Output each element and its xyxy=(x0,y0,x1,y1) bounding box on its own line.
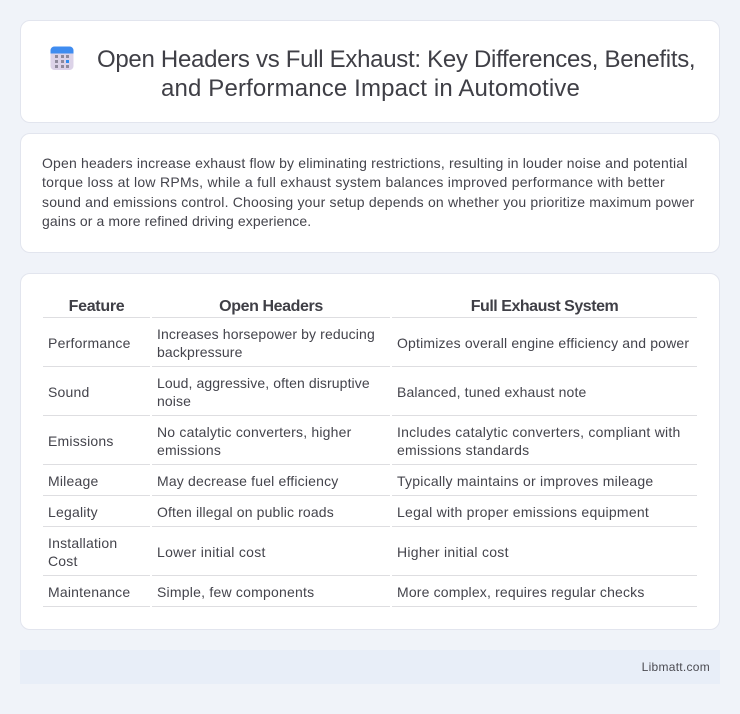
title xyxy=(97,46,695,102)
intro text: Open headers increase exhaust flow by eliminating restrictions, resulting in louder noise and potential xyxy=(42,155,688,171)
row: emissions xyxy=(48,424,681,458)
intro card xyxy=(20,133,720,253)
row: installation cost: Cost xyxy=(48,553,78,569)
row: maintenance: More complex, requires regular checks xyxy=(397,584,644,600)
row: performance: backpressure xyxy=(157,344,242,360)
intro text xyxy=(42,155,694,229)
intro text: torque loss at low RPMs, while a full exhaust system balances improved performance with better xyxy=(42,174,665,190)
table header: Full Exhaust System xyxy=(471,298,618,315)
row: sound: Sound xyxy=(48,384,89,400)
row: performance: Increases horsepower by reducing xyxy=(157,326,375,342)
row: installation cost: Lower initial cost xyxy=(157,544,266,560)
row: installation cost: Installation xyxy=(48,535,117,551)
row: maintenance xyxy=(48,584,644,600)
row: installation cost xyxy=(48,535,509,569)
title: Open Headers vs Full Exhaust: Key Differences, Benefits, xyxy=(97,46,695,73)
table header: Open Headers xyxy=(219,298,323,315)
row: performance: Optimizes overall engine efficiency and power xyxy=(397,335,689,351)
row: performance xyxy=(48,326,689,360)
row: legality: Legality xyxy=(48,504,98,520)
row: sound xyxy=(48,375,586,409)
row: sound: noise xyxy=(157,393,191,409)
footer credit: Libmatt.com xyxy=(642,660,710,674)
icon: calendar xyxy=(50,46,74,70)
row: mileage: Mileage xyxy=(48,473,98,489)
table header: Feature xyxy=(69,298,124,315)
row: maintenance: Simple, few components xyxy=(157,584,314,600)
table header xyxy=(69,298,618,315)
row: emissions: No catalytic converters, higher xyxy=(157,424,352,440)
row: performance: Performance xyxy=(48,335,131,351)
title: and Performance Impact in Automotive xyxy=(161,75,580,102)
row: sound: Loud, aggressive, often disruptive xyxy=(157,375,370,391)
row: emissions: Includes catalytic converters, compliant with xyxy=(397,424,681,440)
row: emissions: Emissions xyxy=(48,433,114,449)
comparison table card xyxy=(20,273,720,630)
row: emissions: emissions standards xyxy=(397,442,529,458)
row: sound: Balanced, tuned exhaust note xyxy=(397,384,586,400)
row: legality: Legal with proper emissions equipment xyxy=(397,504,649,520)
row: emissions: emissions xyxy=(157,442,221,458)
footer bar xyxy=(20,650,720,684)
row: maintenance: Maintenance xyxy=(48,584,130,600)
title card xyxy=(20,20,720,123)
row: mileage: May decrease fuel efficiency xyxy=(157,473,338,489)
intro text: gains or a more refined driving experience. xyxy=(42,213,311,229)
intro text: sound and emissions control. Choosing your setup depends on whether you prioritize maximum power xyxy=(42,194,694,210)
row: mileage: Typically maintains or improves mileage xyxy=(397,473,653,489)
row: legality: Often illegal on public roads xyxy=(157,504,334,520)
row: legality xyxy=(48,504,649,520)
row: mileage xyxy=(48,473,653,489)
row: installation cost: Higher initial cost xyxy=(397,544,509,560)
